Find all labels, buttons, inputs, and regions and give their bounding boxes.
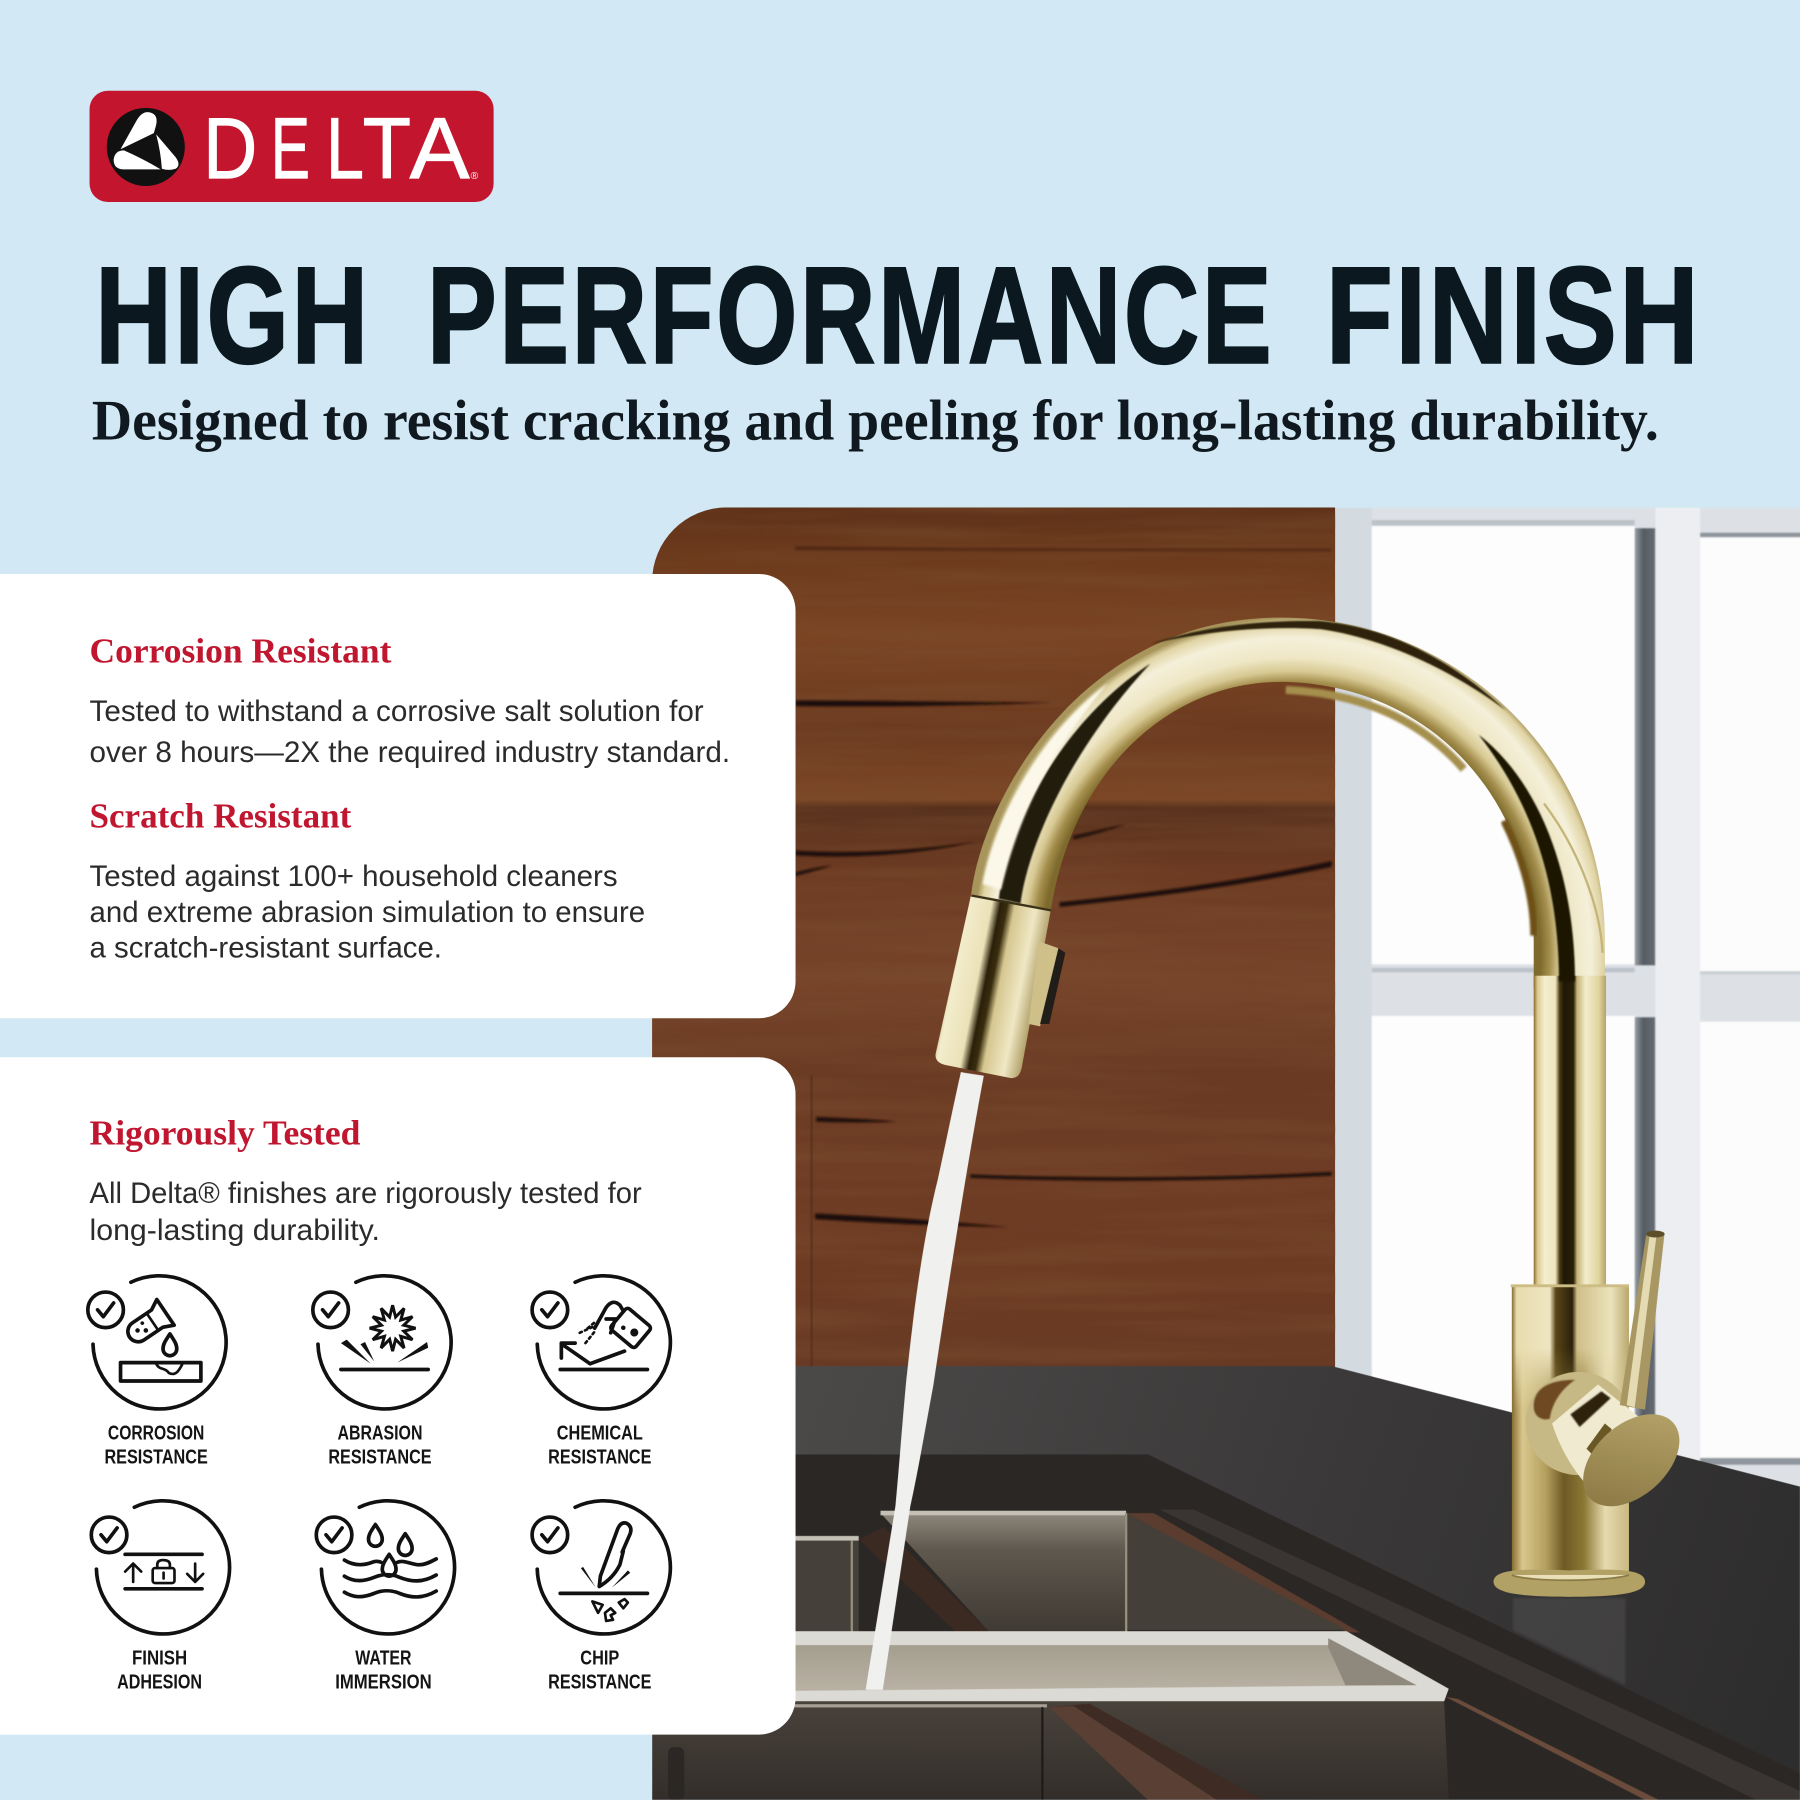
front sink basin: [652, 1631, 1659, 1800]
text: rigorously tested body: All Delta® finishes are rigorously tested for: [90, 1177, 642, 1210]
subtitle: Designed to resist cracking and peeling for long-lasting durability.: [92, 390, 1659, 453]
handle hub: [1526, 1372, 1638, 1481]
title: FINISH: [1326, 239, 1701, 393]
label: water immersion: IMMERSION: [335, 1671, 432, 1694]
pull-down head: [935, 894, 1065, 1078]
panel: rigorously tested: [0, 1057, 796, 1735]
heading: corrosion resistant: Corrosion Resistant: [90, 632, 392, 670]
icon: water immersion: [316, 1501, 455, 1634]
label: chemical resistance: CHEMICAL: [557, 1422, 643, 1445]
text: scratch body: and extreme abrasion simulation to ensure: [90, 896, 645, 929]
lever: [1620, 1231, 1665, 1410]
handle disk: [1583, 1414, 1680, 1506]
label: water immersion: WATER: [355, 1647, 412, 1670]
label: chip resistance: [548, 1647, 651, 1694]
flange: [1493, 1570, 1645, 1597]
text: rigorously tested body: [90, 1177, 642, 1247]
label: abrasion resistance: RESISTANCE: [328, 1446, 432, 1469]
label: chemical resistance: RESISTANCE: [548, 1446, 651, 1469]
rear sink basin: [796, 1510, 1360, 1633]
faucet base body: [1493, 1285, 1645, 1597]
window behind faucet: [1332, 507, 1800, 1495]
wood wall panel: [652, 507, 1335, 1368]
label: corrosion resistance: CORROSION: [108, 1422, 204, 1445]
wordmark: T: [363, 101, 411, 197]
gooseneck spout: [971, 618, 1606, 1287]
icon: abrasion resistance: [313, 1276, 451, 1409]
faucet: [935, 618, 1697, 1597]
label: abrasion resistance: [328, 1422, 432, 1469]
label: chemical resistance: [548, 1422, 651, 1469]
text: corrosion body: Tested to withstand a corrosive salt solution for: [90, 695, 704, 728]
icon: corrosion resistance: [88, 1276, 226, 1409]
label: corrosion resistance: RESISTANCE: [104, 1446, 208, 1469]
wordmark: E: [271, 101, 310, 197]
icon: chemical resistance: [532, 1276, 670, 1409]
title: PERFORMANCE: [427, 239, 1274, 393]
label: finish adhesion: ADHESION: [117, 1671, 202, 1694]
text: scratch body: a scratch-resistant surface.: [90, 931, 442, 964]
title: HIGH: [95, 239, 371, 393]
wordmark: D: [203, 101, 257, 197]
icon: delta triangle mark: [107, 108, 185, 186]
wordmark: A: [410, 101, 470, 197]
countertop: [652, 1366, 1800, 1800]
text: rigorously tested body: long-lasting durability.: [90, 1214, 380, 1247]
heading: rigorously tested: Rigorously Tested: [90, 1115, 360, 1153]
ledge sheen: [1159, 1510, 1800, 1800]
wordmark: L: [326, 101, 364, 197]
wordmark: [203, 101, 470, 197]
logo: Delta: [90, 91, 494, 202]
text: scratch body: [90, 860, 645, 964]
photo: faucet in kitchen: [652, 507, 1800, 1800]
text: corrosion body: over 8 hours—2X the required industry standard.: [90, 736, 730, 769]
head button: [1029, 941, 1058, 1026]
text: corrosion body: [90, 695, 730, 769]
panel: corrosion and scratch resistance: [0, 574, 796, 1018]
label: finish adhesion: [117, 1647, 202, 1694]
registered mark: ®: [471, 171, 479, 182]
label: abrasion resistance: ABRASION: [338, 1422, 422, 1445]
heading: scratch resistant: Scratch Resistant: [90, 798, 352, 836]
water stream: [866, 1072, 984, 1690]
text: scratch body: Tested against 100+ household cleaners: [90, 860, 618, 893]
label: corrosion resistance: [104, 1422, 208, 1469]
label: finish adhesion: FINISH: [132, 1647, 187, 1670]
label: chip resistance: RESISTANCE: [548, 1671, 651, 1694]
sink ledge: [652, 1454, 1800, 1800]
label: chip resistance: CHIP: [580, 1647, 619, 1670]
faucet reflection on counter: [1513, 1598, 1626, 1685]
title: [95, 239, 1701, 393]
icon: finish adhesion: [91, 1501, 230, 1634]
icon: chip resistance: [532, 1501, 670, 1634]
label: water immersion: [335, 1647, 432, 1694]
